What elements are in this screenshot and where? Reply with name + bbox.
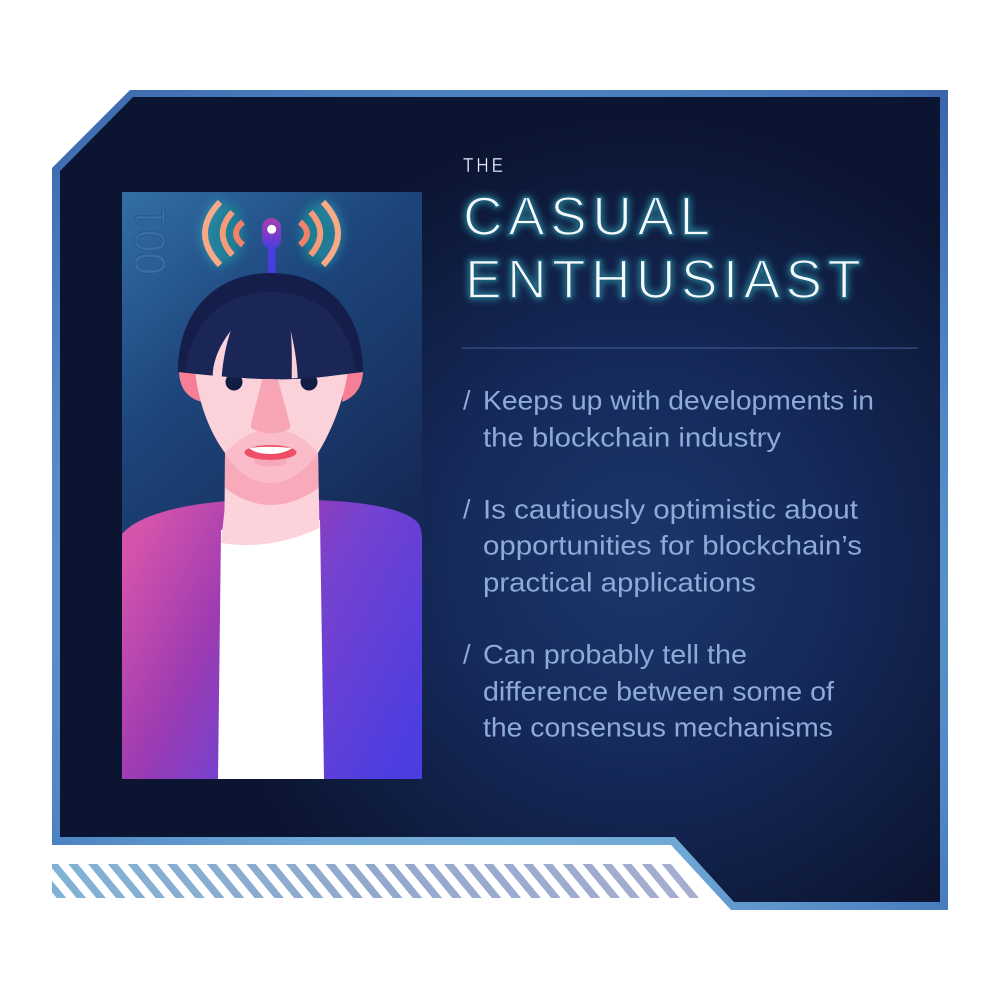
bullet: keeps up: /: [463, 386, 471, 416]
bullet: cautiously optimistic: practical applications: [483, 568, 756, 598]
shirt: [218, 520, 324, 779]
heading glow: [463, 185, 861, 310]
panel: main frame: [52, 90, 948, 910]
label: 001: 001: [126, 207, 175, 275]
bullet: cautiously optimistic: /: [463, 494, 471, 524]
hair: [178, 273, 363, 379]
bullet: cautiously optimistic: [463, 494, 862, 598]
jacket: [122, 500, 422, 779]
beard shade: [225, 429, 318, 483]
bullet: keeps up: Keeps up with developments in: [483, 386, 874, 416]
bullet: consensus mechanisms: Can probably tell the: [483, 640, 747, 670]
portrait: casual enthusiast: [122, 192, 422, 779]
bullet: cautiously optimistic: Is cautiously optimistic about: [483, 494, 859, 524]
striped decoration: [52, 864, 700, 898]
eyes: [226, 376, 318, 390]
ears: [179, 370, 363, 402]
heading: [463, 154, 861, 310]
bullet: consensus mechanisms: /: [463, 640, 471, 670]
bullet: consensus mechanisms: [463, 640, 835, 742]
neck: [221, 450, 320, 545]
heading: casual enthusiast: ENTHUSIAST: [465, 248, 861, 310]
heading glow: ENTHUSIAST: [465, 248, 861, 310]
bullet: keeps up: [463, 386, 874, 452]
divider: [462, 348, 918, 349]
mouth: [244, 445, 296, 466]
nose: [251, 376, 290, 434]
heading: the: THE: [463, 154, 503, 176]
heading glow: CASUAL: [463, 185, 710, 247]
bullet: keeps up: the blockchain industry: [483, 422, 782, 452]
bullet: cautiously optimistic: opportunities for blockchain’s: [483, 530, 862, 560]
portrait background: [122, 192, 422, 534]
icon: antenna: [262, 218, 281, 275]
icon: signal waves: [205, 202, 338, 265]
bullet: consensus mechanisms: difference between some of: [483, 676, 835, 706]
bullet: consensus mechanisms: the consensus mechanisms: [483, 712, 833, 742]
heading: casual enthusiast: [463, 185, 861, 310]
heading: casual enthusiast: CASUAL: [463, 185, 710, 247]
face: [196, 374, 348, 453]
neck shadow: [225, 450, 318, 505]
